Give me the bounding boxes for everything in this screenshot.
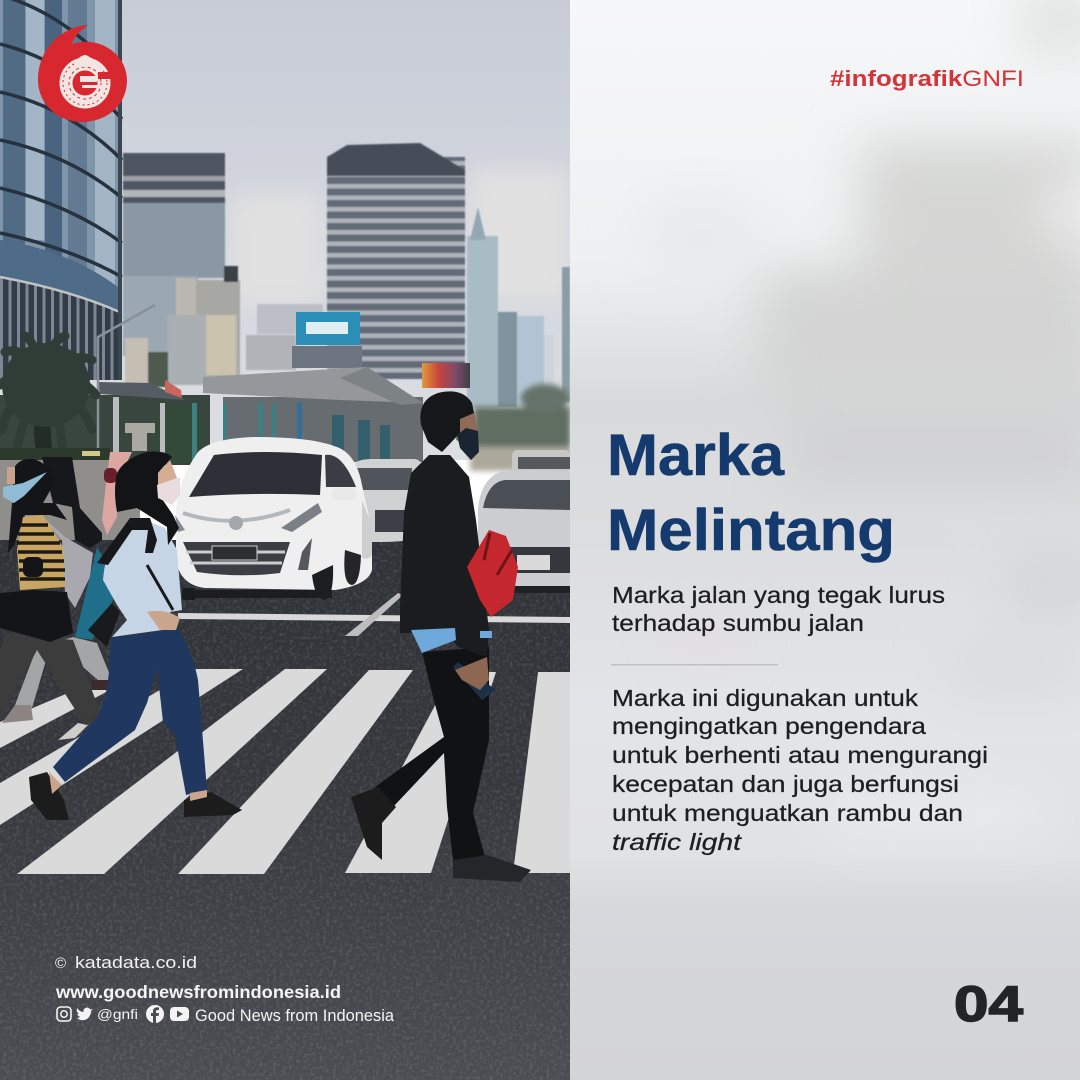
grey shoe (2, 705, 33, 723)
red bag (467, 530, 518, 617)
face (456, 412, 478, 445)
hair (420, 391, 474, 452)
front shoe (184, 792, 242, 817)
hand (147, 611, 180, 630)
dark red mask (104, 468, 117, 483)
woman in pink hijab (102, 452, 132, 535)
walking man (351, 391, 531, 882)
black shoulder bag (0, 590, 73, 642)
lane line (345, 593, 403, 636)
back boot (351, 787, 396, 860)
trousers (375, 647, 489, 860)
explanation text: untuk berhenti atau mengurangi (612, 742, 988, 768)
blue face mask (3, 472, 47, 503)
brand name: Good News from Indonesia (195, 1006, 395, 1025)
explanation text: untuk menguatkan rambu dan (612, 800, 963, 826)
social icons row (57, 1005, 395, 1025)
dark cloak (8, 503, 67, 553)
woman with dark hair (42, 457, 102, 548)
icon: instagram (57, 1007, 71, 1021)
transit station (203, 367, 423, 463)
sky (0, 0, 570, 460)
explanation text: traffic light (612, 829, 743, 855)
white car (175, 437, 372, 600)
front shoe (453, 855, 531, 882)
ankles (49, 772, 207, 801)
explanation text: kecepatan dan juga berfungsi (612, 771, 959, 797)
back shoe (29, 772, 69, 820)
blurred shapes (650, 0, 1080, 830)
website: www.goodnewsfromindonesia.id (55, 982, 341, 1002)
backpack (75, 547, 113, 640)
icon: youtube (170, 1007, 189, 1021)
clouds (232, 170, 570, 305)
road grain (0, 540, 570, 1080)
batik shirt (411, 628, 456, 653)
tree line (470, 384, 570, 471)
led sign (422, 363, 470, 388)
explanation text (612, 685, 988, 855)
photo panel: pedestrians on a zebra crossing (0, 0, 570, 1080)
grey backpack (37, 512, 93, 608)
logo: GNFI (38, 25, 127, 122)
face (158, 460, 177, 490)
asphalt road (0, 540, 570, 1080)
photo credit mark: © (55, 955, 66, 972)
black arm (23, 557, 43, 577)
explanation text: Marka ini digunakan untuk (612, 685, 918, 711)
mask (157, 477, 180, 505)
face mask (457, 428, 479, 460)
shoulder strap (147, 565, 173, 610)
face (7, 467, 15, 484)
icon: twitter (77, 1008, 93, 1020)
icon: facebook (146, 1005, 164, 1023)
shirt (103, 518, 182, 637)
woman in black hijab, front (29, 452, 242, 820)
title: Marka (607, 423, 785, 488)
title: Melintang (607, 498, 895, 563)
explanation text: mengingatkan pengendara (612, 713, 927, 739)
hand (455, 657, 489, 690)
stop line (178, 613, 570, 623)
background skyline (123, 143, 570, 408)
definition text: Marka jalan yang tegak lurus (612, 582, 945, 608)
phone (453, 662, 496, 700)
canopy, palm tree and greenery (0, 305, 210, 540)
definition text (612, 582, 945, 636)
page number: 04 (954, 976, 1023, 1032)
credit text: katadata.co.id (75, 953, 197, 972)
jeans (53, 627, 207, 795)
definition text: terhadap sumbu jalan (612, 610, 864, 636)
hijab (115, 452, 179, 545)
small shoe (90, 680, 110, 690)
hashtag: #infografik GNFI (830, 66, 1024, 91)
jacket (400, 455, 489, 657)
straps (97, 518, 157, 565)
white sneaker (58, 723, 88, 740)
zebra stripes (0, 669, 570, 874)
panel: blurred text background (570, 0, 1080, 1080)
striped shirt (17, 515, 65, 590)
black hijab (13, 458, 50, 503)
dark trousers, front walker (0, 633, 102, 725)
title (607, 423, 895, 563)
glass tower (0, 0, 122, 380)
grey trousers, back walker (15, 637, 112, 708)
pedestrian group on the left (0, 452, 132, 740)
billboard (292, 312, 362, 368)
social handle: @gnfi (97, 1006, 138, 1022)
background cars (352, 450, 570, 593)
